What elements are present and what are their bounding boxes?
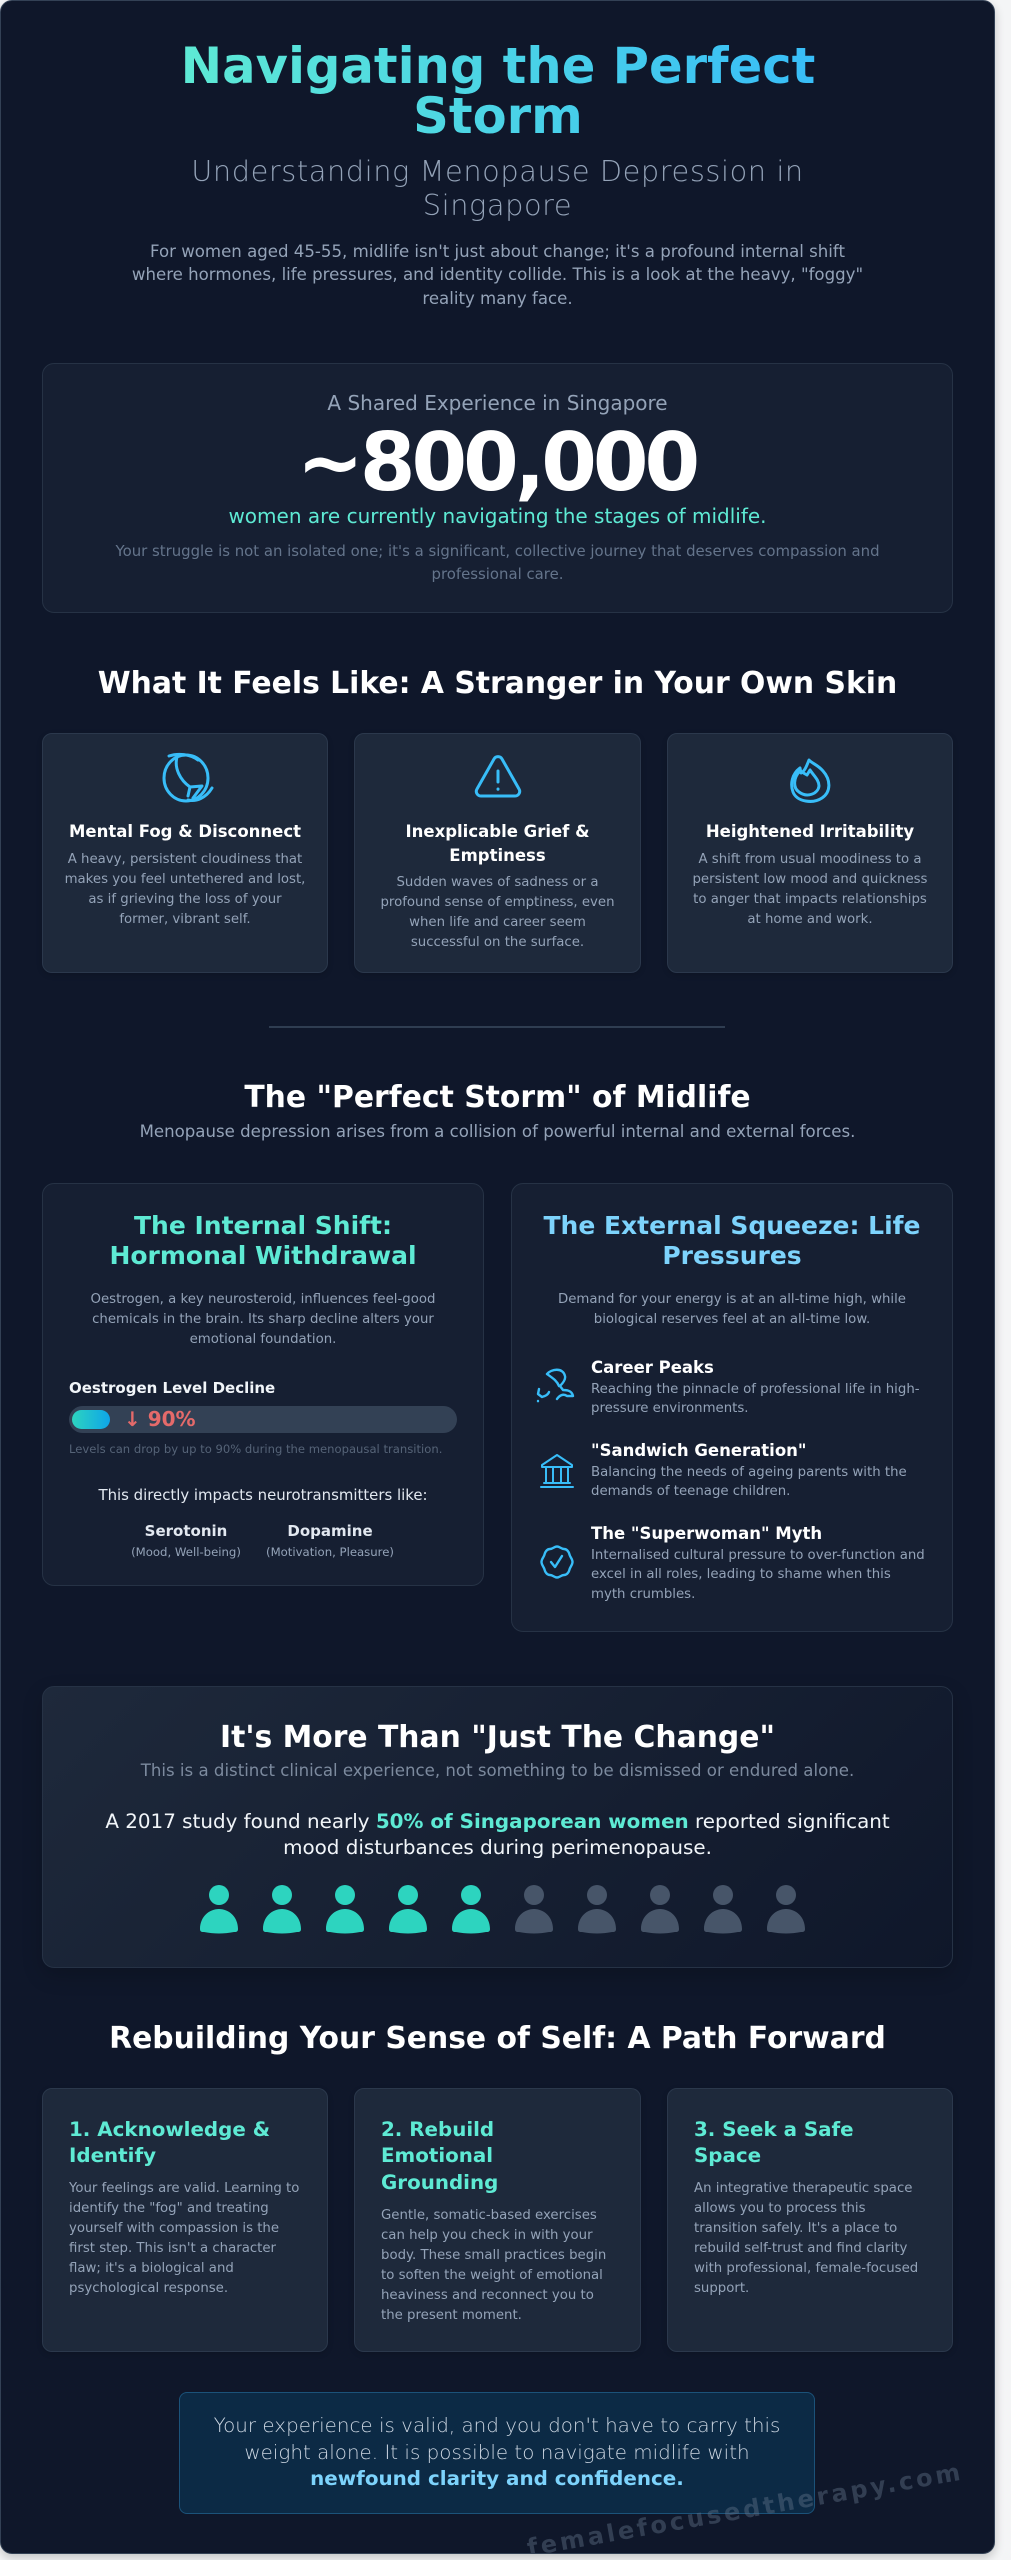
panel text: emotional foundation. xyxy=(190,1332,336,1347)
card text: profound sense of emptiness, even xyxy=(380,895,615,910)
title: Navigating the Perfect xyxy=(181,37,815,95)
item text: demands of teenage children. xyxy=(591,1484,790,1499)
panel text: chemicals in the brain. Its sharp decline alters your xyxy=(92,1312,434,1327)
card heading: Emptiness xyxy=(449,846,546,864)
step title xyxy=(381,2118,498,2194)
list item: career peaks xyxy=(591,1358,920,1416)
callout text: newfound clarity and confidence. xyxy=(310,2467,684,2490)
icon: flame xyxy=(790,758,830,803)
heading: path forward: Rebuilding Your Sense of Self: A Path Forward xyxy=(109,2021,886,2056)
callout text xyxy=(214,2414,780,2490)
step text: with professional, female-focused xyxy=(694,2261,918,2276)
step title: 1. Acknowledge & xyxy=(69,2118,270,2140)
item heading: "Sandwich Generation" xyxy=(591,1441,807,1460)
panel heading: The Internal Shift: xyxy=(134,1211,392,1240)
step text: Gentle, somatic-based exercises xyxy=(381,2208,597,2223)
panel: mental fog xyxy=(42,733,328,973)
panel: internal shift xyxy=(42,1183,484,1586)
step title: 3. Seek a Safe xyxy=(694,2118,854,2140)
card text xyxy=(65,852,305,927)
item text: pressure environments. xyxy=(591,1401,748,1416)
divider xyxy=(269,1026,725,1028)
panel: irritability xyxy=(667,733,953,973)
step text xyxy=(381,2208,606,2323)
step title: Space xyxy=(694,2144,761,2167)
panel heading: The External Squeeze: Life xyxy=(543,1211,921,1240)
card text xyxy=(692,852,928,927)
card text: successful on the surface. xyxy=(411,935,584,950)
intro text: reality many face. xyxy=(422,289,573,308)
card heading: Inexplicable Grief & xyxy=(406,822,590,841)
subtitle: Understanding Menopause Depression in xyxy=(191,154,804,188)
panel subheading: This is a distinct clinical experience, not something to be dismissed or endured alone. xyxy=(141,1761,854,1780)
step text: can help you check in with your xyxy=(381,2228,593,2243)
name: Serotonin xyxy=(145,1522,227,1540)
step text: identify the "fog" and treating xyxy=(69,2201,269,2216)
item heading: The "Superwoman" Myth xyxy=(591,1524,822,1543)
list item: superwoman myth xyxy=(591,1524,925,1602)
step text: allows you to process this xyxy=(694,2201,866,2216)
step text: transition safely. It's a place to xyxy=(694,2221,897,2236)
item text: Internalised cultural pressure to over-function and xyxy=(591,1548,925,1562)
icon: badge check xyxy=(540,1545,574,1579)
pictogram: 5 in 10 women xyxy=(200,1885,805,1934)
study text: mood disturbances during perimenopause. xyxy=(283,1836,712,1859)
icon: fog head xyxy=(162,752,214,802)
step title: 2. Rebuild xyxy=(381,2118,494,2140)
panel text: Oestrogen, a key neurosteroid, influences feel-good xyxy=(91,1292,435,1307)
item text: Reaching the pinnacle of professional life in high- xyxy=(591,1382,920,1396)
panel: step 2 xyxy=(354,2088,641,2352)
callout text: weight alone. It is possible to navigate midlife with xyxy=(244,2440,750,2464)
step text: to soften the weight of emotional xyxy=(381,2268,603,2283)
subtitle xyxy=(191,154,804,222)
step title: Grounding xyxy=(381,2171,498,2194)
callout: closing message xyxy=(179,2392,815,2514)
icon: institution xyxy=(540,1454,574,1488)
big number: ~800,000 xyxy=(297,416,696,509)
intro text: where hormones, life pressures, and identity collide. This is a look at the heavy, "foggy" xyxy=(132,265,863,284)
card text: persistent low mood and quickness xyxy=(692,872,928,887)
card text: when life and career seem xyxy=(409,915,586,930)
icon: warning xyxy=(474,755,522,798)
card text: at home and work. xyxy=(747,912,873,927)
item text: myth crumbles. xyxy=(591,1587,695,1602)
step text: heaviness and reconnect you to xyxy=(381,2288,594,2303)
card heading: Mental Fog & Disconnect xyxy=(69,822,301,841)
step text: Your feelings are valid. Learning to xyxy=(69,2181,299,2196)
panel: more than the change xyxy=(42,1686,953,1968)
stat note xyxy=(115,542,880,583)
list item: sandwich generation xyxy=(591,1441,907,1499)
step title: Emotional xyxy=(381,2144,493,2167)
title xyxy=(176,42,820,141)
study text xyxy=(105,1810,890,1859)
card text xyxy=(380,875,615,950)
bar note: Levels can drop by up to 90% during the menopausal transition. xyxy=(69,1442,442,1456)
icon: career xyxy=(536,1368,574,1402)
intro text: For women aged 45-55, midlife isn't just about change; it's a profound internal shift xyxy=(150,242,845,261)
item text xyxy=(591,1382,920,1416)
panel heading: It's More Than "Just The Change" xyxy=(220,1720,775,1755)
panel text: biological reserves feel at an all-time low. xyxy=(594,1312,870,1327)
step text: rebuild self-trust and find clarity xyxy=(694,2241,907,2256)
item text: Balancing the needs of ageing parents with the xyxy=(591,1464,907,1480)
step text: support. xyxy=(694,2281,749,2296)
heading: what it feels like: What It Feels Like: A Stranger in Your Own Skin xyxy=(98,666,897,700)
neurotransmitter intro: This directly impacts neurotransmitters like: xyxy=(98,1486,428,1504)
panel text: Demand for your energy is at an all-time high, while xyxy=(558,1292,906,1307)
name: Dopamine xyxy=(287,1522,373,1540)
role: (Motivation, Pleasure) xyxy=(266,1545,394,1559)
study text: A 2017 study found nearly 50% of Singaporean women reported significant xyxy=(105,1810,890,1832)
role: (Mood, Well-being) xyxy=(131,1545,241,1559)
item text xyxy=(591,1548,925,1602)
panel heading xyxy=(543,1211,921,1270)
stat note: Your struggle is not an isolated one; it's a significant, collective journey that deserves compassion and xyxy=(115,542,880,560)
card text: A heavy, persistent cloudiness that xyxy=(68,852,302,867)
step text: first step. This isn't a character xyxy=(69,2241,276,2256)
bar value: ↓ 90% xyxy=(124,1407,196,1431)
step text: psychological response. xyxy=(69,2281,228,2296)
panel: external squeeze xyxy=(511,1183,953,1632)
title: Storm xyxy=(413,86,583,144)
step text: the present moment. xyxy=(381,2308,522,2323)
step text: flaw; it's a biological and xyxy=(69,2261,234,2276)
card text: A shift from usual moodiness to a xyxy=(698,852,922,867)
intro text xyxy=(132,242,863,308)
stat caption: women are currently navigating the stages of midlife. xyxy=(228,504,767,528)
panel: shared experience xyxy=(42,363,953,613)
card heading: Heightened Irritability xyxy=(706,822,914,841)
callout text: Your experience is valid, and you don't have to carry this xyxy=(214,2414,780,2437)
step title xyxy=(694,2118,854,2167)
panel: grief xyxy=(354,733,641,973)
card text: to anger that impacts relationships xyxy=(693,892,927,907)
panel heading: Hormonal Withdrawal xyxy=(109,1241,417,1270)
neurotransmitter: dopamine xyxy=(266,1522,394,1559)
step text xyxy=(69,2181,299,2296)
panel text xyxy=(558,1292,906,1327)
stat note: professional care. xyxy=(432,565,563,583)
item text: excel in all roles, leading to shame when this xyxy=(591,1567,891,1582)
panel heading xyxy=(109,1211,417,1270)
card heading xyxy=(406,822,590,864)
step text: An integrative therapeutic space xyxy=(694,2181,912,2196)
step text xyxy=(694,2181,918,2296)
item heading: Career Peaks xyxy=(591,1358,714,1377)
heading: perfect storm: The "Perfect Storm" of Midlife xyxy=(244,1080,751,1115)
bar label: Oestrogen Level Decline xyxy=(69,1379,275,1397)
stat label: A Shared Experience in Singapore xyxy=(327,391,668,415)
bar fill xyxy=(72,1410,110,1429)
step title: Identify xyxy=(69,2144,156,2167)
item text xyxy=(591,1464,907,1499)
subtitle: Singapore xyxy=(423,188,572,222)
section intro: Menopause depression arises from a collision of powerful internal and external forces. xyxy=(140,1122,855,1141)
panel heading: Pressures xyxy=(662,1241,802,1270)
card text: makes you feel untethered and lost, xyxy=(65,872,305,887)
card text: former, vibrant self. xyxy=(119,912,251,927)
panel text xyxy=(91,1292,435,1347)
step text: yourself with compassion is the xyxy=(69,2221,279,2236)
bar chart: oestrogen decline xyxy=(69,1406,457,1433)
step title xyxy=(69,2118,270,2167)
neurotransmitter: serotonin xyxy=(131,1522,241,1559)
panel: step 1 xyxy=(42,2088,328,2352)
card text: as if grieving the loss of your xyxy=(88,892,282,907)
step text: body. These small practices begin xyxy=(381,2248,606,2263)
panel: step 3 xyxy=(667,2088,953,2352)
card text: Sudden waves of sadness or a xyxy=(396,875,599,890)
